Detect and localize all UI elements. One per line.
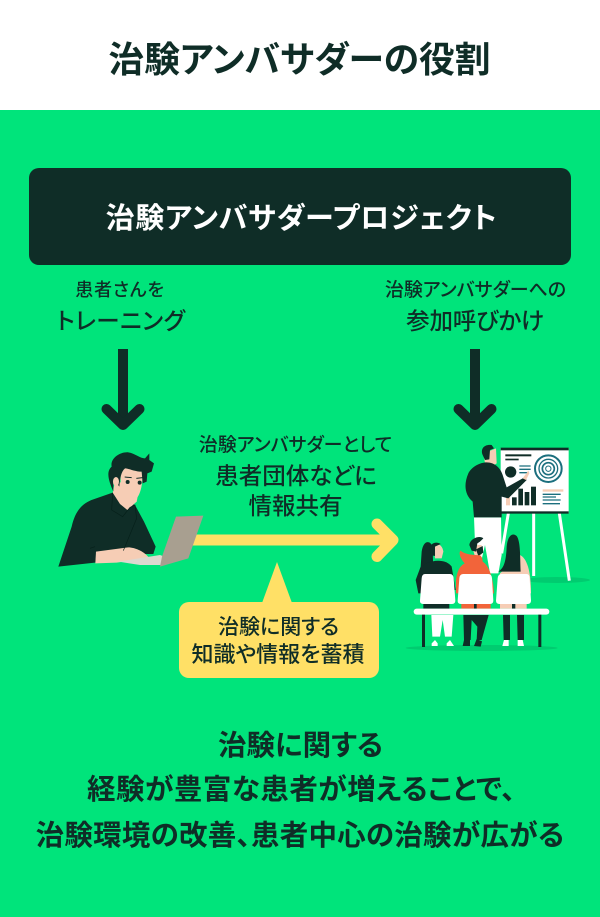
panel: project banner: 治験アンバサダープロジェクト: [106, 201, 497, 235]
callout: accumulate knowledge: [179, 562, 379, 678]
arrow: training down to patient: [106, 349, 140, 425]
text block: share information: 治験アンバサダーとして: [199, 434, 392, 456]
text block: training patients: 患者さんを: [75, 280, 165, 300]
text block: training patients: トレーニング: [57, 308, 186, 334]
audience member: long-haired woman: [497, 535, 531, 646]
audience member: ponytail woman: [416, 542, 456, 646]
callout: accumulate knowledge: 治験に関する: [218, 616, 339, 639]
callout: accumulate knowledge: 知識や情報を蓄積: [192, 642, 364, 667]
text block: call for ambassadors: [385, 279, 566, 334]
text block: conclusion: 治験環境の改善、患者中心の治験が広がる: [36, 819, 564, 852]
arrow: invitation down to presenter: [458, 349, 492, 425]
arrow: share to patient groups: [190, 524, 393, 556]
text block: share information: 患者団体などに: [215, 463, 377, 489]
panel: project banner: [29, 168, 571, 265]
title: 治験アンバサダーの役割: [108, 40, 491, 80]
text block: conclusion: 経験が豊富な患者が増えることで、: [87, 773, 516, 806]
easel legs: [502, 513, 569, 581]
text block: conclusion: 治験に関する: [218, 730, 383, 762]
chairs: [420, 574, 531, 604]
text block: share information: [199, 434, 392, 519]
icon: man working on laptop: [58, 452, 203, 567]
text block: conclusion: [36, 730, 564, 852]
bench: [414, 609, 549, 647]
floor shadows: [523, 577, 590, 583]
illustration: presenter and seated audience: [406, 445, 590, 651]
audience member: man in orange hoodie: [456, 537, 494, 647]
text block: call for ambassadors: 参加呼びかけ: [406, 308, 544, 334]
presentation board: [501, 448, 569, 514]
text block: call for ambassadors: 治験アンバサダーへの: [385, 279, 566, 301]
text block: share information: 情報共有: [248, 493, 342, 519]
presenter: [465, 445, 529, 573]
text block: training patients: [57, 280, 186, 334]
